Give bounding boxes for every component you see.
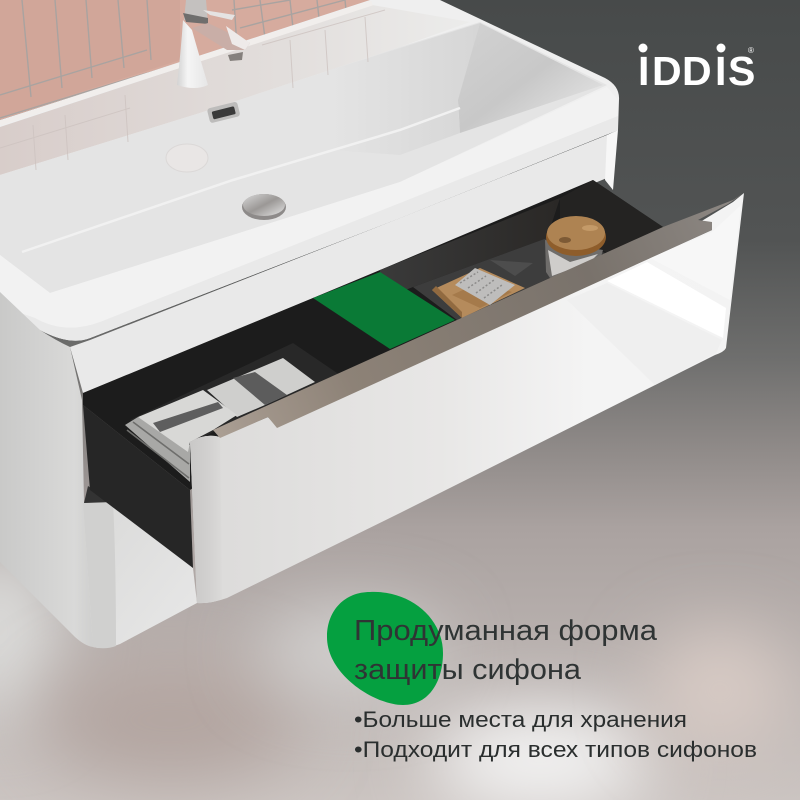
- tile reflections on deck: [0, 10, 385, 170]
- strip edge: [605, 130, 618, 190]
- bullet list: •Подходит для всех типов сифонов: [354, 737, 757, 762]
- basin interior: [0, 22, 607, 293]
- basin: [0, 0, 619, 341]
- drawer front reflections: [567, 205, 741, 385]
- heading: защиты сифона: [354, 654, 582, 686]
- logo: IDDIS: ®: [748, 46, 754, 55]
- jar: [545, 216, 606, 278]
- drawer rounded end cap: [190, 436, 222, 603]
- brushed metal handle: [213, 193, 744, 438]
- logo: IDDIS: IDDIS: [638, 48, 755, 94]
- right compartment side wall: [560, 180, 663, 252]
- overflow: [207, 101, 240, 123]
- back deck with tile reflection: [0, 5, 470, 175]
- green accent blob: [327, 592, 443, 705]
- front lip lower band: [18, 116, 618, 341]
- open drawer: [83, 180, 744, 603]
- right compartment floor: [413, 237, 605, 320]
- bullet list: [354, 707, 757, 762]
- left compartment floor: [130, 343, 340, 445]
- drawer interior: [83, 180, 663, 490]
- basin outer body: [0, 0, 619, 341]
- cabinet left side panel: [0, 292, 93, 647]
- left drawer side wall: [83, 405, 193, 568]
- drawer front panel: [190, 193, 744, 603]
- back lip below wall: [0, 3, 372, 123]
- green divider: [313, 272, 455, 349]
- runner gap: [84, 486, 113, 503]
- basin right inner wall: [458, 23, 603, 133]
- towel: [125, 358, 315, 482]
- fixed strip under basin: [70, 135, 607, 393]
- drain: [242, 194, 286, 220]
- basin mid back wall: [330, 23, 480, 155]
- front rim: [0, 87, 618, 341]
- cabinet: [0, 130, 618, 648]
- bullet list: •Больше места для хранения: [354, 707, 687, 732]
- heading: Продуманная форма: [354, 615, 658, 647]
- ghost drain reflection: [166, 144, 208, 172]
- lower drawer front: [83, 502, 197, 648]
- wall tiles: [0, 0, 375, 120]
- wooden tray: [432, 268, 525, 318]
- right compartment back wall: [380, 198, 560, 300]
- basin ridge: [22, 108, 460, 252]
- faucet: [177, 0, 250, 88]
- floor reflection: [490, 260, 533, 276]
- lower drawer rounded end: [83, 502, 116, 648]
- heading: [354, 615, 658, 686]
